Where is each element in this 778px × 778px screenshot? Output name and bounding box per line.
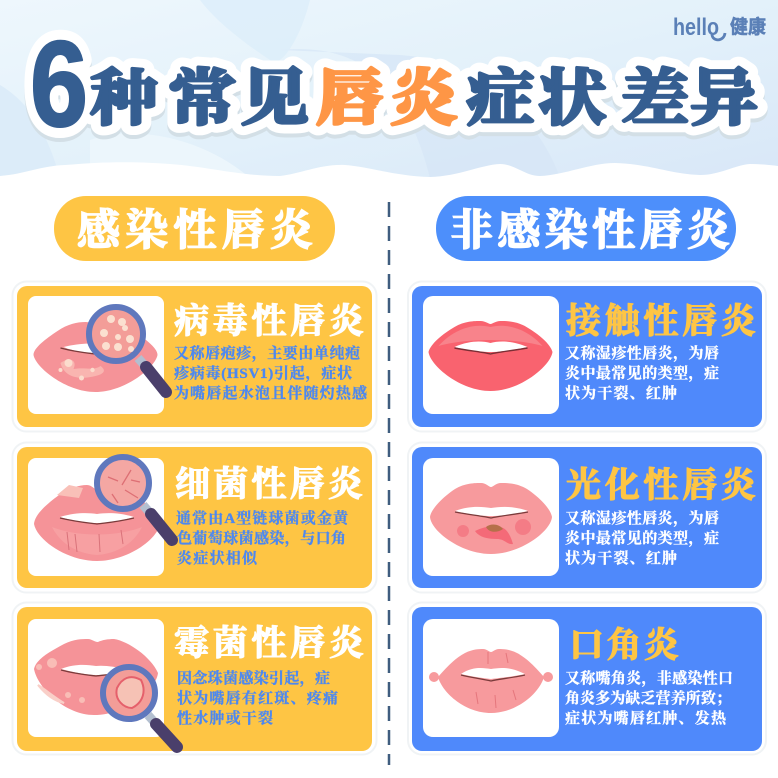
text: 霉菌性唇炎: 状为嘴唇有红斑、疼痛: [177, 689, 338, 707]
title white outline: 症: [466, 65, 534, 132]
text: 口角炎: [565, 626, 733, 727]
text: 接触性唇炎: 接触性唇炎: [566, 302, 759, 341]
title white outline: 常: [169, 65, 236, 132]
heading: 非感染性唇炎: 非感染性唇炎: [450, 206, 733, 255]
text: 病毒性唇炎: [174, 302, 368, 402]
text: 光化性唇炎: 状为干裂、红肿: [565, 549, 677, 567]
logo: hello健康: [673, 14, 766, 41]
title text: 6: [30, 16, 88, 152]
text: 光化性唇炎: 又称湿疹性唇炎，为唇: [565, 509, 719, 528]
title white outline: 异: [690, 65, 758, 132]
text: 接触性唇炎: 状为干裂、红肿: [565, 384, 677, 402]
title white outline: 状: [538, 65, 607, 132]
center divider: [388, 202, 390, 765]
title white outline: 炎: [390, 65, 463, 132]
icon: red lips: [428, 321, 552, 391]
title text: 见: [241, 65, 308, 132]
text: 口角炎: 又称嘴角炎，非感染性口: [565, 669, 733, 688]
panel: 口角炎: [408, 602, 766, 754]
title white outline: 6: [30, 16, 88, 152]
text: 病毒性唇炎: 为嘴唇起水泡且伴随灼热感: [174, 384, 368, 402]
logo: hello健康: 健康: [730, 15, 766, 38]
icon: lips with cold sores: [34, 322, 158, 392]
title white outline: 种: [90, 65, 158, 132]
title text: 状: [538, 65, 607, 132]
icon: magnifier: [103, 667, 177, 747]
text: 光化性唇炎: [565, 466, 759, 567]
title: [30, 16, 758, 152]
text: 霉菌性唇炎: [174, 624, 367, 727]
text: 细菌性唇炎: 细菌性唇炎: [175, 465, 366, 504]
title text: 异: [690, 65, 758, 132]
title white outline: [30, 16, 758, 152]
text: 接触性唇炎: [565, 302, 759, 402]
title text: 症: [466, 65, 534, 132]
heading: 感染性唇炎: 感染性唇炎: [77, 206, 316, 255]
heading: 感染性唇炎: [54, 196, 335, 261]
title text: 种: [90, 65, 158, 132]
text: 霉菌性唇炎: 因念珠菌感染引起，症: [177, 669, 330, 688]
text: 细菌性唇炎: 炎症状相似: [177, 549, 258, 567]
title text: 常: [169, 65, 236, 132]
title text: [30, 16, 758, 152]
text: 口角炎: 口角炎: [569, 626, 682, 665]
text: 细菌性唇炎: 通常由A型链球菌或金黄: [176, 509, 350, 527]
title white outline: 见: [241, 65, 308, 132]
text: 接触性唇炎: 又称湿疹性唇炎，为唇: [565, 344, 719, 363]
text: 病毒性唇炎: 疹病毒(HSV1)引起，症状: [174, 364, 353, 383]
title white outline: 差: [621, 65, 689, 132]
text: 光化性唇炎: 炎中最常见的类型，症: [565, 529, 719, 548]
panel: 霉菌性唇炎: [12, 602, 376, 754]
logo: hello健康: hello: [673, 14, 719, 41]
title text: 唇: [316, 65, 384, 132]
title white outline: 唇: [316, 65, 384, 132]
title text: 差: [621, 65, 689, 132]
header background: [0, 0, 778, 185]
panel: 光化性唇炎: [408, 442, 766, 592]
icon: magnifier: [89, 307, 166, 392]
text: 口角炎: 症状为嘴唇红肿、发热: [565, 709, 727, 727]
icon: lips with cracked corners: [429, 649, 553, 713]
text: 病毒性唇炎: 又称唇疱疹，主要由单纯疱: [174, 344, 360, 363]
text: 接触性唇炎: 炎中最常见的类型，症: [565, 364, 719, 383]
title text: 炎: [390, 65, 463, 132]
panel: 细菌性唇炎: [12, 442, 376, 592]
text: 细菌性唇炎: 色葡萄球菌感染，与口角: [177, 529, 346, 548]
text: 光化性唇炎: 光化性唇炎: [566, 466, 759, 505]
text: 霉菌性唇炎: 霉菌性唇炎: [174, 624, 367, 663]
icon: magnifier: [97, 457, 172, 540]
text: 口角炎: 角炎多为缺乏营养所致；: [565, 689, 731, 707]
icon: lips with sun damage: [430, 483, 552, 554]
heading: 非感染性唇炎: [436, 196, 736, 261]
icon: lips with bacterial cracks: [34, 485, 160, 561]
panel: 接触性唇炎: [408, 282, 766, 432]
text: 霉菌性唇炎: 性水肿或干裂: [177, 709, 273, 727]
text: 病毒性唇炎: 病毒性唇炎: [174, 302, 367, 341]
text: 细菌性唇炎: [175, 465, 366, 567]
panel: 病毒性唇炎: [12, 282, 376, 432]
icon: lips with fungal patches: [34, 639, 158, 715]
